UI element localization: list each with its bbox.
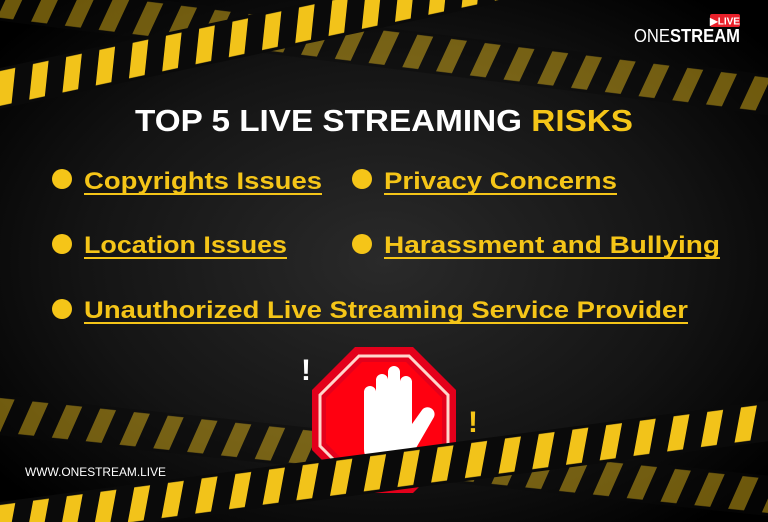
- item: Privacy Concerns: Privacy Concerns: [384, 168, 617, 195]
- item: Location Issues: Location Issues: [84, 232, 287, 259]
- exclamation white: !: [301, 354, 311, 387]
- logo: ▶LIVE: [709, 16, 740, 28]
- logo: [634, 14, 740, 46]
- tape: front bottom bright: [0, 395, 768, 522]
- title: TOP 5 LIVE STREAMING RISKS: [135, 103, 633, 138]
- item: Harassment and Bullying: Harassment and Bullying: [384, 232, 720, 259]
- icon: stop sign: [312, 347, 456, 493]
- exclamation yellow: !: [468, 406, 478, 439]
- footer url: WWW.ONESTREAM.LIVE: [25, 467, 166, 479]
- tape: front top bright: [0, 0, 713, 115]
- item: Copyrights Issues: Copyrights Issues: [84, 168, 322, 195]
- item: Unauthorized provider: Unauthorized Live Streaming Service Provider: [84, 297, 688, 324]
- tape: back bottom dim: [0, 393, 768, 518]
- tape: back top dim: [0, 0, 768, 120]
- logo: ONESTREAM: [634, 26, 740, 46]
- icon: hand: [364, 366, 435, 461]
